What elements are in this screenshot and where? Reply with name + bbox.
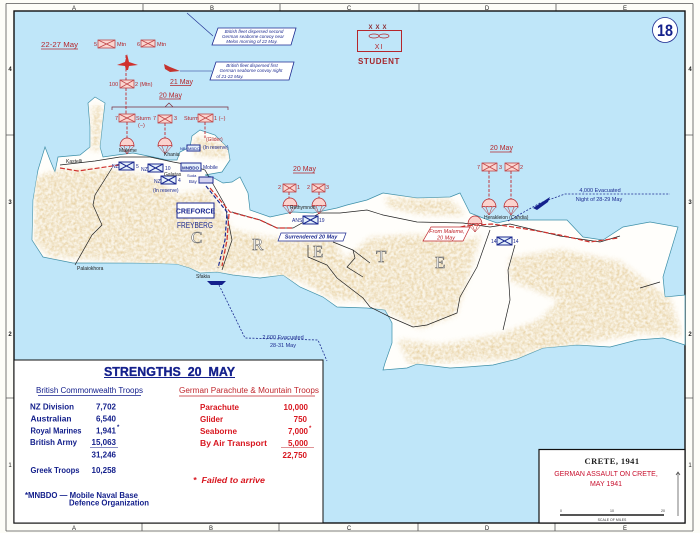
column: German troops: 10,000 bbox=[284, 403, 309, 412]
red advance routes bbox=[60, 165, 618, 266]
column: British Commonwealth troops: * bbox=[117, 425, 120, 431]
callout: From Maleme bbox=[423, 227, 470, 242]
German XI corps symbol bbox=[358, 25, 402, 66]
German unit labels: 7 bbox=[477, 165, 480, 171]
German unit labels: Sturm bbox=[136, 116, 151, 122]
German unit labels: Mtn bbox=[117, 42, 126, 48]
callout: second convoy: British fleet dispersed second bbox=[225, 29, 284, 34]
German unit labels bbox=[94, 42, 523, 191]
evacuation route from Sfakia: 2,600 Evacuated bbox=[262, 335, 304, 341]
callout: Surrendered 20 May bbox=[278, 233, 346, 241]
place names: Khania bbox=[164, 152, 180, 158]
callout: second convoy bbox=[187, 13, 296, 45]
plate number 18 bbox=[652, 18, 678, 42]
British unit labels bbox=[112, 146, 519, 245]
German unit labels: 7 bbox=[115, 116, 118, 122]
terrain shading bbox=[34, 105, 682, 364]
map frame with grid letters and numbers: D bbox=[485, 526, 490, 532]
column: British Commonwealth troops: Defence Organization bbox=[69, 498, 149, 508]
German unit labels: 2 bbox=[520, 165, 523, 171]
German unit symbols bbox=[98, 40, 519, 192]
column: British Commonwealth troops: 1,941 bbox=[96, 426, 117, 436]
German unit labels: 2 (Mtn) bbox=[135, 82, 153, 88]
British unit labels: Suda bbox=[187, 173, 197, 178]
date labels: 20 May bbox=[490, 145, 513, 152]
callout: Surrendered 20 May: Surrendered 20 May bbox=[285, 234, 338, 240]
place names: Maleme bbox=[119, 148, 137, 154]
column: German troops: 7,000 bbox=[288, 427, 309, 436]
callout: first convoy: British fleet dispersed first bbox=[226, 63, 279, 68]
red dashed drop lines bbox=[126, 55, 511, 202]
column: British Commonwealth troops: 15,063 bbox=[92, 438, 117, 447]
German unit labels: 100 bbox=[109, 82, 118, 88]
label: CRETE letters: R bbox=[252, 235, 264, 254]
British withdrawal route bbox=[206, 186, 227, 268]
column: British Commonwealth troops: British Commonwealth Troops bbox=[36, 386, 143, 395]
German XI corps symbol: XXX bbox=[368, 25, 390, 31]
British unit symbols bbox=[119, 145, 512, 245]
German XI corps symbol: STUDENT bbox=[358, 57, 400, 66]
British unit labels: NB bbox=[180, 146, 186, 151]
map frame with grid letters and numbers: E bbox=[623, 526, 627, 532]
roads bbox=[60, 157, 660, 330]
column: German troops: 5,000 bbox=[288, 439, 309, 448]
icon: parachutes bbox=[120, 138, 518, 232]
place names: Rethymnon bbox=[290, 205, 316, 211]
column: German troops: * bbox=[309, 426, 312, 432]
callout: second convoy: Melos morning of 22 May. bbox=[226, 39, 278, 44]
column: British Commonwealth troops: 6,540 bbox=[96, 414, 117, 424]
map frame with grid letters and numbers: B bbox=[209, 526, 213, 532]
place names: Kastelli bbox=[66, 159, 82, 165]
British unit labels: NZ bbox=[154, 179, 161, 185]
panel: map title bbox=[539, 450, 685, 523]
place names: Sfakia bbox=[196, 274, 210, 280]
panel: strengths table bbox=[14, 360, 323, 523]
German unit labels: 2 bbox=[278, 185, 281, 191]
callout: From Maleme: 20 May bbox=[436, 236, 456, 242]
map frame with grid letters and numbers: C bbox=[347, 526, 352, 532]
British reserve note: (In reserve) bbox=[203, 145, 229, 151]
German unit labels: 1 (−) bbox=[214, 116, 226, 122]
map frame with grid letters and numbers: 2 bbox=[688, 332, 692, 338]
island of Crete bbox=[32, 97, 685, 370]
date labels bbox=[41, 42, 513, 173]
column: German troops: By Air Transport bbox=[200, 439, 267, 448]
place names: Herakleion (Candia) bbox=[484, 215, 529, 221]
column: German troops: * Failed to arrive bbox=[193, 476, 266, 485]
label: CRETE letters: E bbox=[435, 253, 445, 272]
German unit labels: 1 bbox=[297, 185, 300, 191]
British unit labels: (In reserve) bbox=[153, 188, 179, 194]
place names bbox=[66, 148, 529, 280]
British unit labels: 14 bbox=[513, 239, 519, 245]
label: CRETE letters: T bbox=[376, 247, 387, 266]
column: British Commonwealth troops: British Army bbox=[30, 438, 78, 447]
map frame with grid letters and numbers: 4 bbox=[8, 67, 12, 73]
panel: map title: GERMAN ASSAULT ON CRETE, bbox=[554, 471, 658, 478]
column: British Commonwealth troops: Royal Marines bbox=[30, 426, 82, 436]
evacuation route from Heraklion bbox=[508, 188, 670, 221]
map frame with grid letters and numbers: 4 bbox=[688, 67, 692, 73]
label: CRETE letters: E bbox=[313, 242, 323, 261]
map frame with grid letters and numbers: A bbox=[72, 6, 76, 12]
map frame with grid letters and numbers: 1 bbox=[688, 463, 692, 469]
column: British Commonwealth troops: 31,246 bbox=[92, 450, 117, 460]
German unit labels: 5 bbox=[94, 42, 97, 48]
column: German troops: Parachute bbox=[200, 403, 240, 412]
map frame with grid letters and numbers: 3 bbox=[8, 200, 12, 206]
map frame with grid letters and numbers: 2 bbox=[8, 332, 12, 338]
panel: map title: MAY 1941 bbox=[590, 481, 622, 488]
map frame with grid letters and numbers: 1 bbox=[8, 463, 12, 469]
British unit labels: 4 bbox=[178, 178, 181, 184]
German unit labels: 7 bbox=[153, 116, 156, 122]
German unit: Glider label: (Glider) bbox=[206, 137, 223, 143]
German unit labels: 3 bbox=[499, 165, 502, 171]
callout: first convoy bbox=[180, 62, 294, 80]
place names: Palaiokhora bbox=[77, 266, 104, 272]
German unit labels: 3 bbox=[174, 116, 177, 122]
scale bar: 0 bbox=[560, 509, 562, 513]
plate number 18: 18 bbox=[657, 21, 673, 40]
column: British Commonwealth troops: *MNBDO — Mobile Naval Base bbox=[25, 491, 139, 500]
column: German troops: 750 bbox=[294, 415, 308, 424]
date labels: 21 May bbox=[170, 79, 193, 86]
map frame with grid letters and numbers: 3 bbox=[688, 200, 692, 206]
callout: From Maleme: From Maleme, bbox=[429, 229, 465, 235]
map frame with grid letters and numbers: A bbox=[72, 526, 76, 532]
British unit labels: Bay bbox=[189, 179, 198, 184]
British unit labels: MBDO bbox=[188, 146, 200, 151]
British unit labels: 5 bbox=[136, 164, 139, 170]
map frame with grid letters and numbers: B bbox=[210, 6, 214, 12]
column: German troops: Glider bbox=[200, 415, 223, 424]
CREFORCE headquarters: CREFORCE bbox=[176, 208, 215, 216]
CREFORCE headquarters bbox=[176, 203, 215, 230]
British unit labels: NZ bbox=[112, 164, 119, 170]
German drop bracket bbox=[112, 103, 228, 110]
icon: transport plane bbox=[117, 54, 138, 70]
German unit labels: Sturm bbox=[184, 116, 199, 122]
date labels: 22-27 May bbox=[41, 42, 79, 49]
scale bar: SCALE OF MILES bbox=[598, 518, 627, 522]
column: British Commonwealth troops: NZ Division bbox=[30, 402, 74, 412]
callout: second convoy: German seaborne convoy near bbox=[222, 34, 285, 39]
German unit labels: 3 bbox=[326, 185, 329, 191]
map frame with grid letters and numbers: E bbox=[623, 6, 627, 12]
evacuation route from Heraklion: 4,000 Evacuated bbox=[579, 188, 621, 194]
date labels: 20 May bbox=[293, 166, 316, 173]
column: British Commonwealth troops: 10,258 bbox=[92, 466, 117, 475]
British unit labels: MNBDO bbox=[182, 166, 199, 170]
British unit labels: Mobile bbox=[203, 165, 218, 171]
column: German troops bbox=[179, 386, 319, 485]
British unit labels: NZ bbox=[141, 167, 148, 173]
British unit labels: 10 bbox=[165, 166, 171, 172]
map frame with grid letters and numbers: C bbox=[347, 6, 352, 12]
callout: first convoy: of 21-22 May. bbox=[216, 74, 244, 79]
panel: map title: CRETE, 1941 bbox=[585, 456, 639, 466]
scale bar: 10 bbox=[610, 509, 614, 513]
label: CRETE letters bbox=[191, 228, 445, 272]
column: British Commonwealth troops bbox=[25, 386, 149, 508]
north arrow bbox=[676, 472, 680, 516]
scale bar bbox=[560, 509, 665, 522]
evacuation route from Heraklion: Night of 28-29 May bbox=[576, 197, 622, 203]
German unit labels: 6 bbox=[137, 42, 140, 48]
label: CRETE letters: C bbox=[191, 228, 202, 247]
column: British Commonwealth troops: Australian bbox=[30, 414, 72, 424]
column: German troops: Seaborne bbox=[200, 427, 238, 436]
scale bar: 20 bbox=[661, 509, 665, 513]
map frame with grid letters and numbers: D bbox=[485, 6, 490, 12]
heading: strengths: STRENGTHS 20 MAY bbox=[104, 365, 236, 379]
column: British Commonwealth troops: Greek Troops bbox=[30, 466, 80, 475]
evacuation route from Sfakia: 28-31 May bbox=[270, 343, 296, 349]
German unit labels: 2 bbox=[307, 185, 310, 191]
CREFORCE headquarters: FREYBERG bbox=[177, 221, 213, 230]
place names: Galatas bbox=[164, 172, 182, 178]
German XI corps symbol: XI bbox=[375, 44, 383, 51]
column: German troops: German Parachute & Mountain Troops bbox=[179, 386, 319, 395]
icon: seaborne convoy bbox=[164, 64, 180, 72]
British unit labels: ANS bbox=[292, 218, 303, 224]
German unit labels: (−) bbox=[138, 123, 145, 129]
British unit labels: 19 bbox=[319, 218, 325, 224]
column: British Commonwealth troops: 7,702 bbox=[96, 402, 117, 412]
column: German troops: 22,750 bbox=[283, 451, 308, 460]
evacuation route from Sfakia bbox=[207, 281, 327, 361]
callout: first convoy: German seaborne convoy night bbox=[220, 68, 283, 73]
date labels: 20 May bbox=[159, 92, 182, 100]
British unit labels: 14 bbox=[491, 239, 497, 245]
German unit labels: Mtn bbox=[157, 42, 166, 48]
